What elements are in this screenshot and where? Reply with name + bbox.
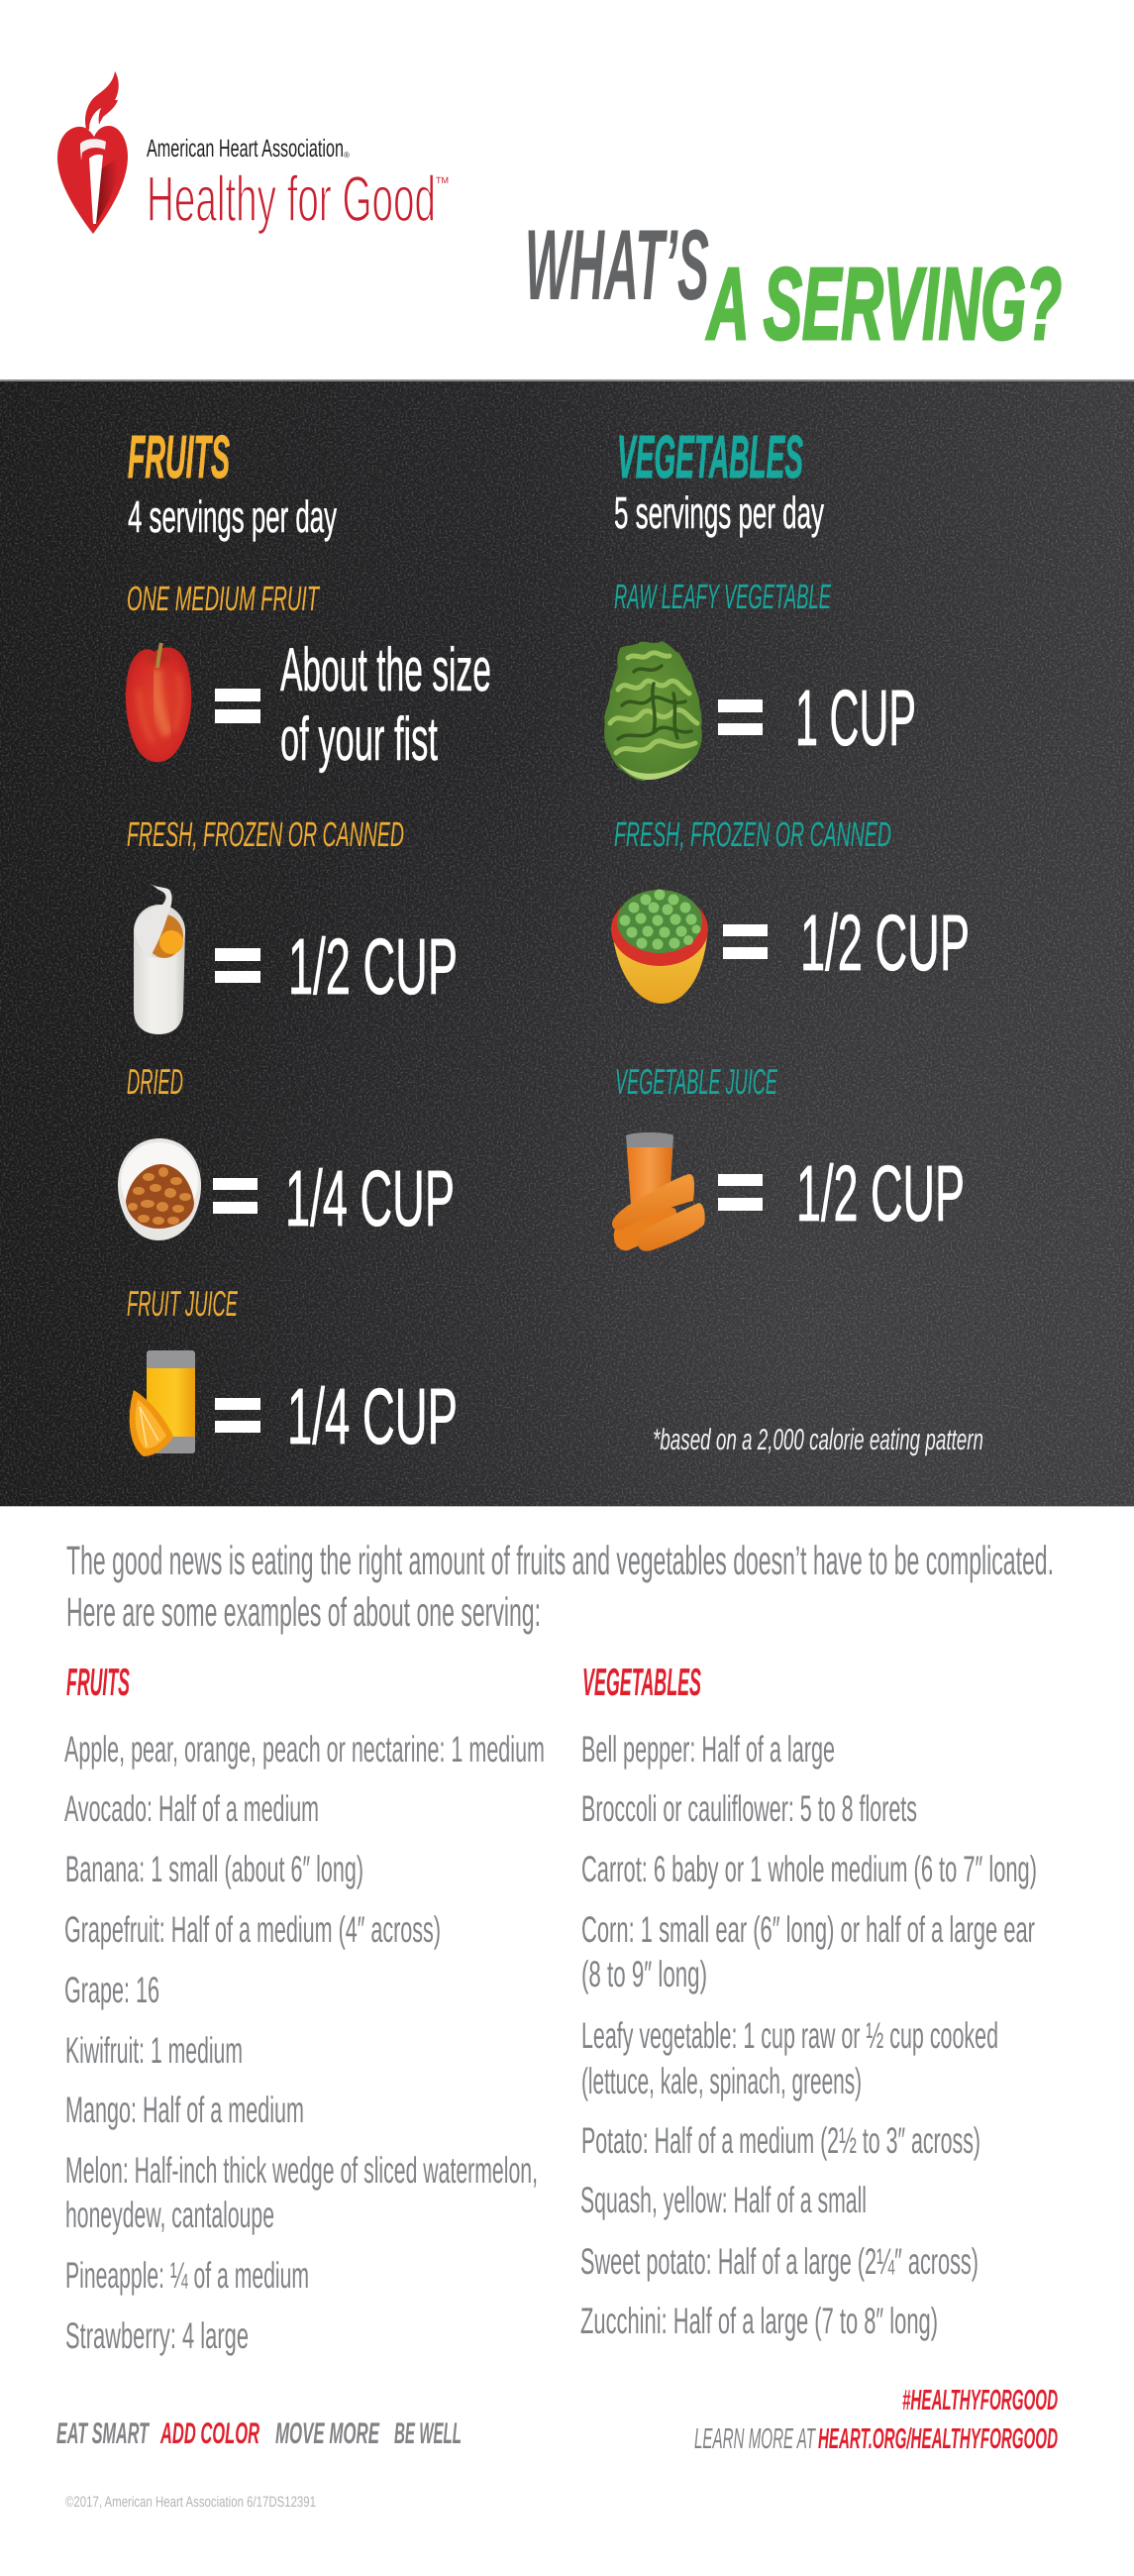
equals sign — [215, 1398, 260, 1433]
fruit list items: honeydew, cantaloupe — [65, 2195, 274, 2235]
label: raw leafy vegetable: RAW LEAFY VEGETABLE — [614, 578, 831, 616]
icon: apple — [126, 643, 191, 762]
equals sign — [718, 1174, 763, 1211]
list: fruit examples — [64, 1662, 545, 2356]
vegetable list items — [580, 1729, 1037, 2341]
list: vegetable examples: VEGETABLES — [582, 1662, 701, 1704]
title: WHAT’S — [525, 210, 709, 321]
icon: lettuce — [604, 641, 702, 781]
fruit list items: Apple, pear, orange, peach or nectarine: 1 medium — [64, 1729, 545, 1770]
equals sign — [723, 924, 768, 959]
equals sign — [215, 689, 260, 723]
label: fresh, frozen or canned: FRESH, FROZEN OR CANNED — [614, 815, 891, 854]
vegetable list items: Squash, yellow: Half of a small — [580, 2180, 867, 2220]
equals sign — [213, 1178, 258, 1214]
footer slogan: BE WELL — [394, 2417, 462, 2450]
fruit list items: Grapefruit: Half of a medium (4″ across) — [64, 1909, 441, 1950]
amount: 1/2 cup: 1/2 CUP — [796, 1149, 965, 1237]
column: vegetables: VEGETABLES — [617, 423, 803, 490]
fruit list items: Banana: 1 small (about 6″ long) — [65, 1849, 363, 1889]
fruit list items: Kiwifruit: 1 medium — [65, 2030, 243, 2071]
registered mark: ® — [344, 151, 350, 160]
fruit list items: Avocado: Half of a medium — [64, 1788, 319, 1829]
equals sign — [215, 948, 260, 983]
panel: dark serving guide — [0, 379, 1134, 1507]
footer links: LEARN MORE AT — [694, 2423, 816, 2455]
panel background — [0, 379, 1134, 1507]
intro text — [66, 1538, 1054, 1635]
vegetable list items: Bell pepper: Half of a large — [581, 1729, 835, 1770]
subheading: 4 servings per day: 4 servings per day — [128, 491, 337, 542]
fruit list items: Strawberry: 4 large — [65, 2315, 249, 2356]
column: fruits — [118, 423, 491, 1460]
column: vegetables — [604, 423, 983, 1456]
footer slogan: EAT SMART — [56, 2417, 150, 2450]
icon: heart and torch — [57, 71, 128, 234]
icon: orange juice and wedge — [130, 1350, 195, 1456]
footer links — [694, 2385, 1058, 2455]
subheading: 5 servings per day: 5 servings per day — [614, 487, 824, 538]
fruit list items: Pineapple: ¼ of a medium — [65, 2255, 309, 2296]
title — [525, 210, 1062, 361]
label: fresh, frozen or canned: FRESH, FROZEN OR CANNED — [127, 815, 404, 854]
fruit list items — [64, 1729, 545, 2356]
trademark: TM — [436, 175, 449, 185]
amount: 1/4 cup: 1/4 CUP — [285, 1154, 455, 1242]
list: vegetable examples — [580, 1662, 1037, 2341]
icon: bowl of dried fruit — [118, 1138, 201, 1240]
copyright: ©2017, American Heart Association 6/17DS12391 — [65, 2494, 316, 2511]
text: about the size of your fist: About the size — [280, 636, 491, 704]
amount: 1/2 cup: 1/2 CUP — [800, 899, 970, 987]
label: vegetable juice: VEGETABLE JUICE — [615, 1061, 777, 1102]
vegetable list items: (lettuce, kale, spinach, greens) — [581, 2061, 862, 2101]
icon: bowl of peas — [611, 890, 708, 1004]
amount: 1 cup: 1 CUP — [795, 674, 916, 762]
text: about the size of your fist — [280, 636, 491, 774]
fruit list items: Mango: Half of a medium — [65, 2090, 304, 2130]
footer slogan: MOVE MORE — [275, 2417, 380, 2450]
intro text: Here are some examples of about one serving: — [66, 1589, 541, 1635]
label: dried: DRIED — [127, 1061, 183, 1102]
footer slogan — [56, 2417, 462, 2450]
list: fruit examples: FRUITS — [66, 1662, 130, 1704]
American Heart Association wordmark: American Heart Association — [147, 135, 344, 162]
amount: 1/4 cup: 1/4 CUP — [287, 1372, 458, 1460]
label: one medium fruit: ONE MEDIUM FRUIT — [127, 580, 320, 618]
label: fruit juice: FRUIT JUICE — [127, 1283, 238, 1324]
equals sign — [718, 699, 763, 735]
text: about the size of your fist: of your fist — [280, 705, 438, 774]
icon: canned fruit — [134, 884, 185, 1034]
Healthy for Good wordmark: Healthy for Good — [147, 162, 436, 235]
amount: 1/2 cup: 1/2 CUP — [288, 922, 458, 1011]
footer slogan: ADD COLOR — [159, 2417, 259, 2450]
fruit list items: Melon: Half-inch thick wedge of sliced watermelon, — [65, 2150, 538, 2191]
column: fruits: FRUITS — [128, 423, 230, 490]
logo: American Heart Association Healthy for Good — [57, 71, 449, 235]
vegetable list items: (8 to 9″ long) — [581, 1954, 707, 1994]
fruit list items: Grape: 16 — [64, 1970, 159, 2010]
icon: carrot juice and carrots — [612, 1132, 705, 1251]
